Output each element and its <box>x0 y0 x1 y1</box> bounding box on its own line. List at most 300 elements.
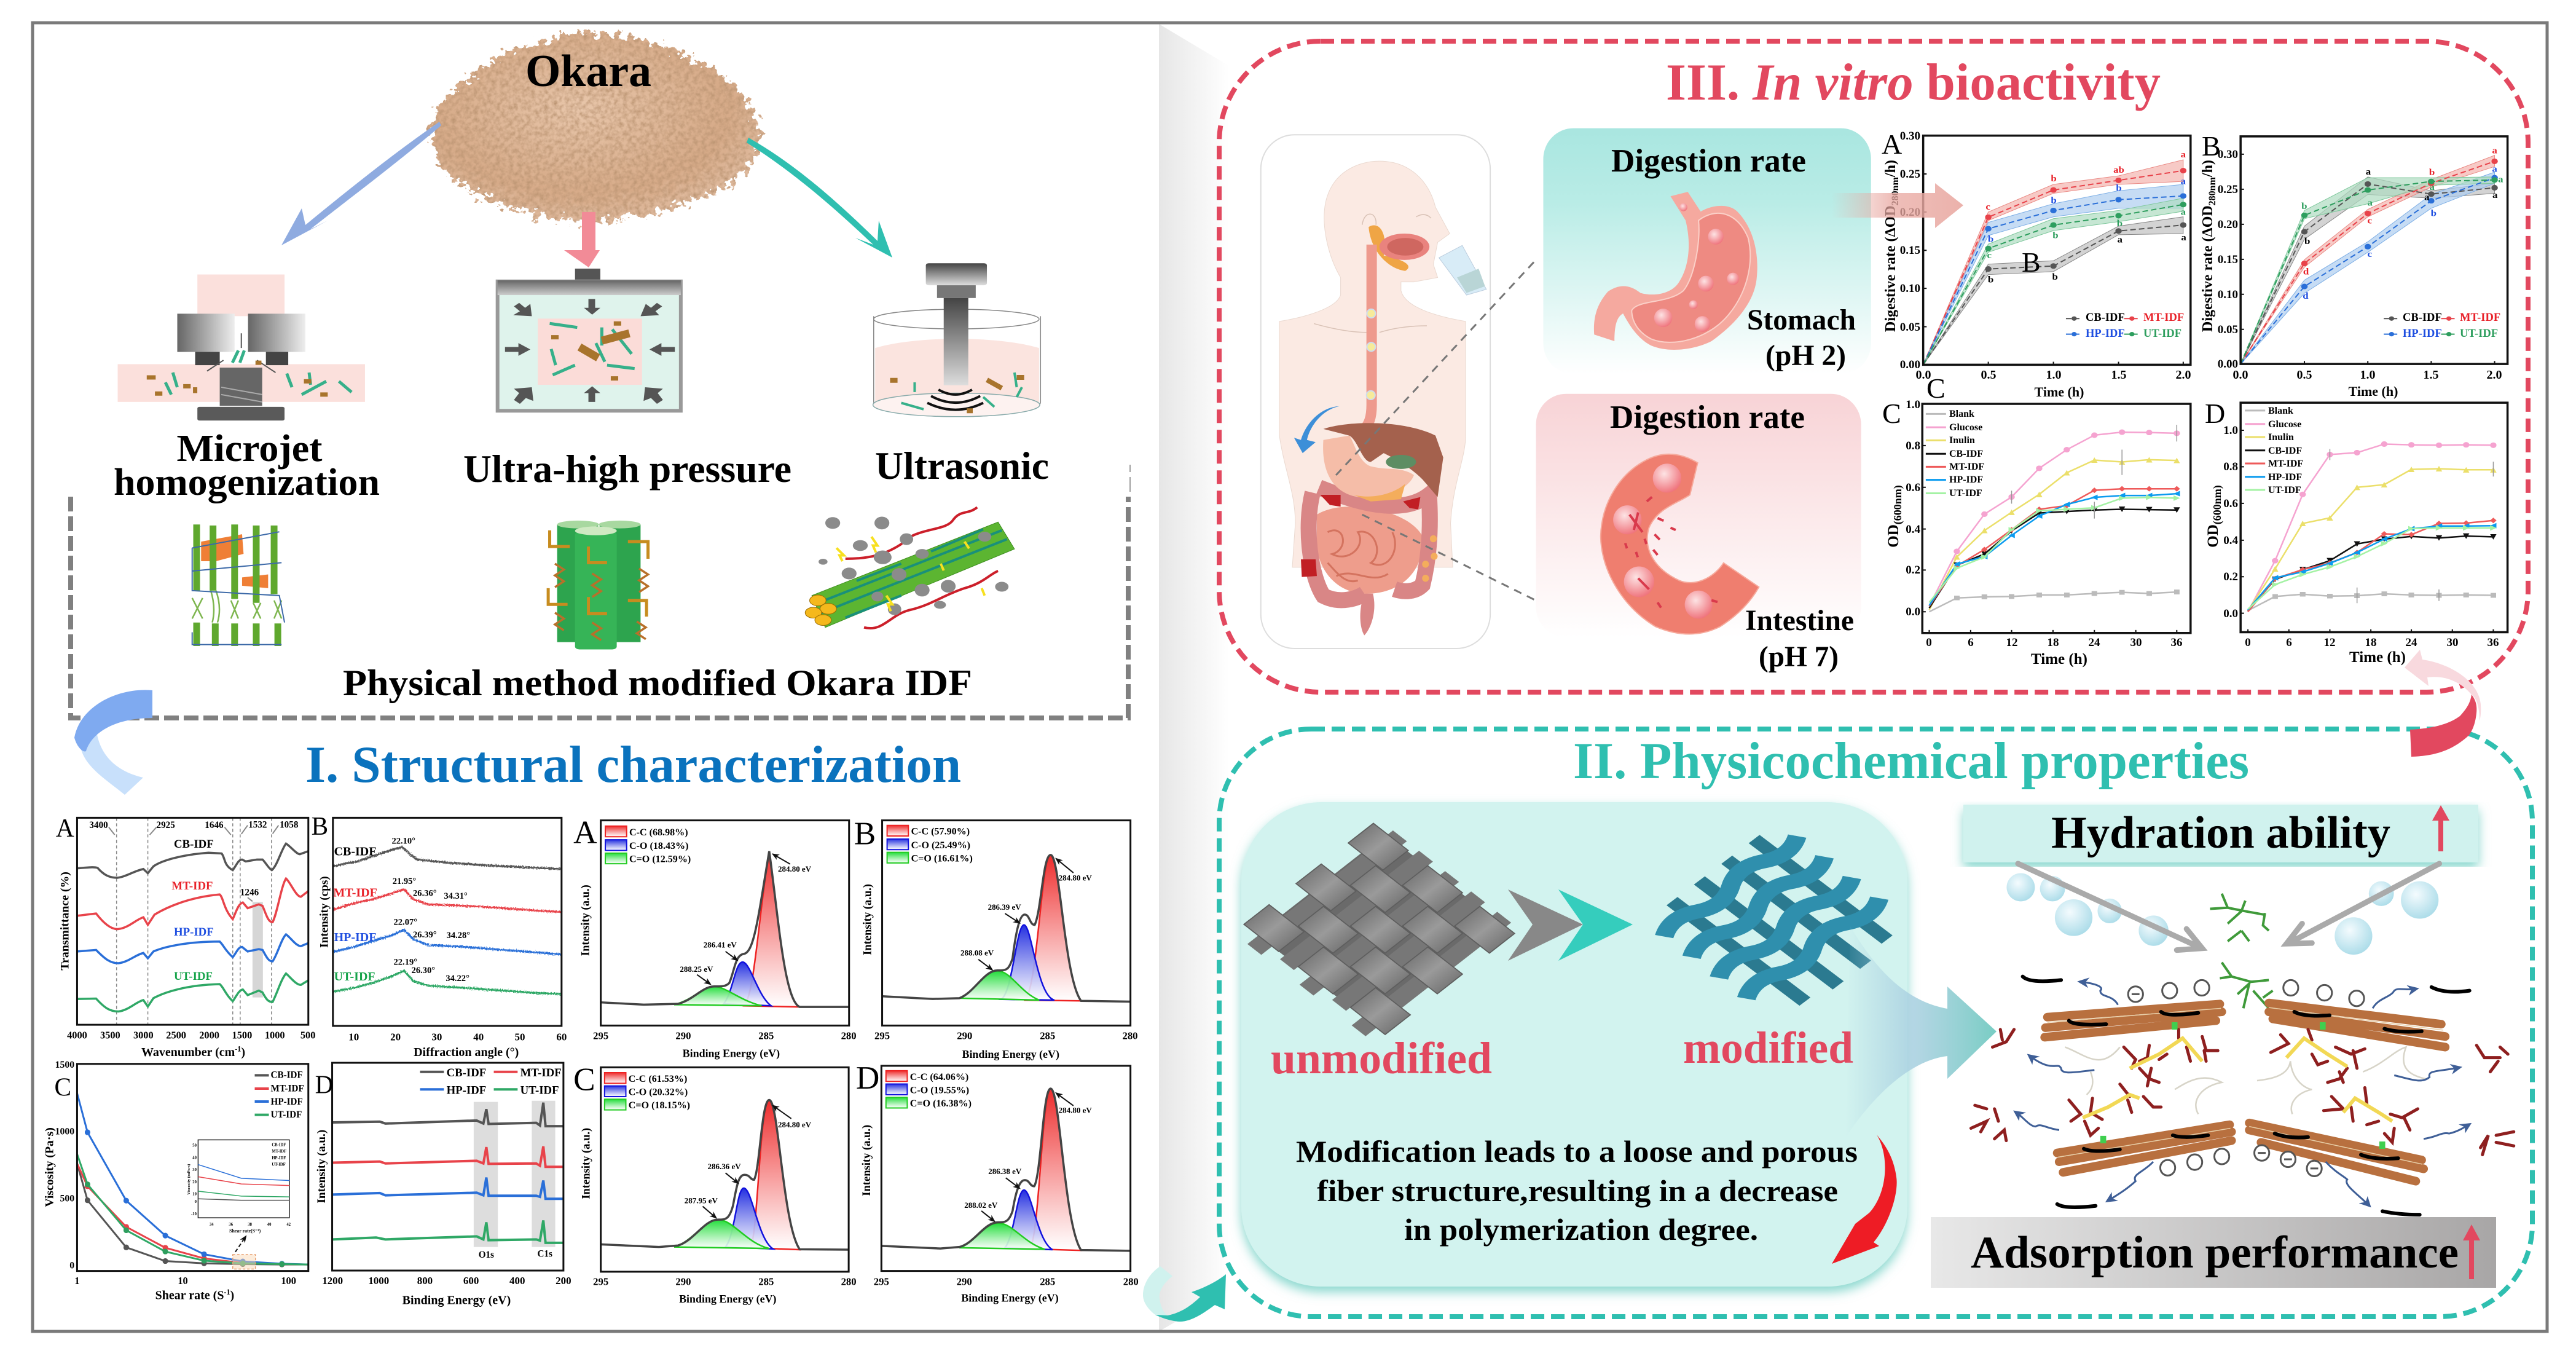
panel: XPS C1s chart D <box>856 1060 1139 1305</box>
chart: digestive rate intestine B <box>2240 136 2508 364</box>
esophagus <box>1364 245 1372 429</box>
dashed container: physical method modified IDF <box>71 497 1128 718</box>
chart B labels: Digestive rate (ΔOD <box>2200 205 2216 332</box>
text block: modification summary: fiber structure,resulting in a decrease <box>1317 1173 1838 1208</box>
panel: XPS C1s chart A: Intensity (a.u.) <box>579 885 592 956</box>
chart B labels: 2.0 <box>2486 368 2502 382</box>
panel: XPS survey chart D: D <box>315 1071 333 1099</box>
arrow: okara to ultrasonic <box>747 138 892 258</box>
chart: digestive rate intestine B: a <box>2498 175 2503 184</box>
panel: XRD chart B: MT-IDF <box>333 886 377 899</box>
label: Physical method modified Okara IDF: Physical method modified Okara IDF <box>343 663 972 703</box>
panel: XRD chart B: 34.28° <box>447 931 470 940</box>
panel: XRD chart B: 50 <box>514 1031 525 1043</box>
panel: viscosity chart C: HP-IDF <box>271 1097 303 1107</box>
chart C labels: 1.0 <box>1906 398 1920 411</box>
chart D labels: Glucose <box>2268 419 2301 430</box>
arrow: hydration up <box>2432 805 2449 851</box>
panel: FTIR chart A: 2925 <box>157 820 175 830</box>
text block: modification summary: Modification leads to a loose and porous <box>1296 1134 1858 1169</box>
chart B labels: 0.00 <box>2218 358 2238 371</box>
chart D labels: Time (h) <box>2349 649 2406 666</box>
panel: XPS C1s chart C <box>573 1061 857 1306</box>
panel: FTIR chart A: Transmittance (%) <box>59 872 71 971</box>
arrow: large gradient arrow into performance panel <box>1845 926 1997 1138</box>
panel: viscosity chart C: CB-IDF <box>271 1070 303 1081</box>
arrow: adsorption up <box>2463 1224 2480 1279</box>
chart C labels: Blank <box>1949 409 1974 419</box>
glass of fibre <box>1439 245 1486 295</box>
chart D labels: 0.6 <box>2223 497 2238 510</box>
chart C labels: 24 <box>2088 636 2100 649</box>
arrow: okara to ultra-high pressure <box>564 212 600 267</box>
panel: XPS C1s chart D: 280 <box>1123 1275 1139 1287</box>
panel: XRD chart B: 10 <box>348 1031 359 1043</box>
chart: digestive rate stomach A: b <box>2052 231 2059 240</box>
banner: hydration ability <box>1963 805 2478 862</box>
panel: XPS C1s chart B: 295 <box>874 1030 890 1042</box>
panel: XPS C1s chart C: Binding Energy (eV) <box>679 1293 777 1306</box>
chart: digestive rate intestine B: a <box>2430 183 2435 192</box>
chart D labels: 1.0 <box>2223 424 2238 437</box>
panel: XPS C1s chart A: 286.41 eV <box>704 940 737 950</box>
heading: III. In vitro bioactivity: III. In vitro bioactivity <box>1666 53 2161 111</box>
chart: digestive rate intestine B: c <box>2368 250 2372 259</box>
label: unmodified: unmodified <box>1271 1033 1492 1083</box>
panel: XRD chart B <box>312 813 567 1059</box>
panel: viscosity chart C: 0 <box>195 1200 197 1204</box>
panel: XPS C1s chart D: 285 <box>1040 1275 1055 1287</box>
panel: XPS C1s chart B: Intensity (a.u.) <box>862 884 874 955</box>
label: intestine pH 7: Intestine <box>1745 605 1854 637</box>
yellow linkers <box>2083 1038 2392 1121</box>
panel: FTIR chart A: 3500 <box>100 1029 120 1041</box>
panel: XPS survey chart D: Intensity (a.u.) <box>315 1130 328 1204</box>
chart: digestive rate stomach A: b <box>2117 219 2122 229</box>
panel: viscosity chart C: 38 <box>248 1223 253 1227</box>
large intestine <box>1309 487 1430 600</box>
label: Microjet homogenization <box>114 428 380 503</box>
chart C labels <box>1882 398 2183 668</box>
panel: viscosity chart C: CB-IDF <box>272 1143 286 1147</box>
panel: FTIR chart A: 4000 <box>67 1029 87 1041</box>
card: stomach digestion <box>1543 128 1871 374</box>
panel: XPS survey chart D: UT-IDF <box>520 1084 559 1097</box>
red polymer <box>1971 1030 2514 1155</box>
label: stomach pH 2: Stomach <box>1747 304 1856 336</box>
chart: digestive rate intestine B: a <box>2424 192 2430 202</box>
panel: XRD chart B: 34.22° <box>446 974 469 984</box>
chart A labels: UT-IDF <box>2143 328 2181 340</box>
panel: FTIR chart A: 3400 <box>89 820 108 830</box>
panel: XPS C1s chart B: 286.39 eV <box>988 902 1021 912</box>
arrow: okara to microjet <box>281 122 441 245</box>
chart A labels: 280nm <box>1890 176 1901 205</box>
panel: XPS survey chart D: 1200 <box>322 1275 343 1287</box>
chart C labels: 12 <box>2006 636 2018 649</box>
chart: digestive rate stomach A: c <box>1987 251 1992 261</box>
chart B labels: 0.5 <box>2297 368 2312 382</box>
chart A labels: Time (h) <box>2035 384 2084 400</box>
panel: XPS C1s chart B: 285 <box>1040 1030 1055 1042</box>
chart D labels: 24 <box>2405 636 2417 649</box>
panel: FTIR chart A: 1000 <box>265 1029 285 1041</box>
chart D labels: 0.8 <box>2223 460 2238 473</box>
panel: viscosity chart C: Viscosity (Pa·s) <box>44 1127 57 1207</box>
panel: XPS C1s chart C: Intensity (a.u.) <box>580 1128 593 1199</box>
panel: FTIR chart A: 1500 <box>232 1029 252 1041</box>
chart A labels: /h) <box>1883 160 1899 178</box>
panel: XPS C1s chart B: 284.80 eV <box>1059 873 1092 882</box>
chart A labels: 0.5 <box>1981 368 1996 382</box>
chart: digestive rate stomach A: b <box>2116 183 2122 193</box>
blue efflux arrows <box>2016 982 2468 1205</box>
chart: digestive rate intestine B: d <box>2303 267 2309 277</box>
panel: XPS C1s chart A: A <box>573 814 597 851</box>
panel: FTIR chart A: CB-IDF <box>174 838 214 851</box>
panel: XPS C1s chart B: 290 <box>957 1030 972 1042</box>
chart B labels: 0.05 <box>2218 323 2238 336</box>
panel: viscosity chart C: 1 <box>74 1275 80 1287</box>
chart: digestive rate intestine B: a <box>2492 191 2498 200</box>
chart C labels: 0.2 <box>1906 564 1920 577</box>
panel: XRD chart B: 40 <box>473 1031 484 1043</box>
panel: XPS C1s chart C: C-C (61.53%) <box>629 1074 687 1084</box>
panel: viscosity chart C: UT-IDF <box>272 1162 286 1167</box>
panel border: III in vitro bioactivity <box>1219 41 2528 692</box>
panel: XPS C1s chart A: C-C (68.98%) <box>629 827 688 838</box>
chart D labels: 12 <box>2324 636 2335 649</box>
chart C labels: MT-IDF <box>1949 462 1984 472</box>
panel: viscosity chart C: 30 <box>192 1168 197 1172</box>
chart A labels: 0.00 <box>1900 358 1920 371</box>
chart B labels: HP-IDF <box>2403 328 2442 340</box>
chart: digestive rate stomach A: b <box>1988 275 1994 285</box>
panel: XPS C1s chart A: 290 <box>675 1030 691 1042</box>
chart D labels: 30 <box>2447 636 2458 649</box>
chart B labels: Time (h) <box>2349 384 2398 399</box>
salivary glands and mouth <box>1368 226 1408 271</box>
chart D labels: OD <box>2205 524 2221 548</box>
icon: intestine cross-section <box>1601 454 1759 634</box>
chart A labels: C <box>1926 373 1946 404</box>
chart: digestive rate stomach A: c <box>1985 202 1990 212</box>
chart C labels: 0.4 <box>1906 523 1921 536</box>
chart: digestive rate intestine B: d <box>2303 291 2309 301</box>
panel: XPS C1s chart C: 290 <box>675 1275 691 1287</box>
panel: XPS C1s chart C: 287.95 eV <box>685 1196 718 1205</box>
chart: digestive rate intestine B: a <box>2368 199 2373 208</box>
panel: FTIR chart A: Wavenumber (cm <box>141 1046 235 1059</box>
chart: growth curve C <box>1922 404 2191 633</box>
arrow: I to II link <box>1143 1266 1226 1322</box>
chart B labels: 0.0 <box>2233 368 2248 382</box>
panel: XRD chart B: CB-IDF <box>334 845 376 859</box>
panel: viscosity chart C: UT-IDF <box>271 1110 302 1120</box>
panel: XRD chart B: 20 <box>390 1031 401 1043</box>
chart: digestive rate stomach A <box>1923 136 2191 365</box>
chart B labels: 0.10 <box>2218 288 2238 301</box>
chart: digestive rate intestine B: a <box>2492 164 2497 174</box>
panel: XPS C1s chart D: C-O (19.55%) <box>910 1085 969 1095</box>
heading: II. Physicochemical properties: II. Physicochemical properties <box>1573 732 2249 790</box>
panel: XPS C1s chart A: 284.80 eV <box>778 864 812 873</box>
panel: XPS C1s chart D: C-C (64.06%) <box>910 1072 968 1082</box>
panel: XRD chart B: 60 <box>556 1031 567 1043</box>
panel: XPS C1s chart A: C=O (12.59%) <box>629 854 691 865</box>
chart: digestive rate intestine B: c <box>2368 216 2372 226</box>
chart B labels: UT-IDF <box>2460 328 2498 340</box>
panel: XPS C1s chart A: 285 <box>758 1030 774 1042</box>
chart: digestive rate intestine B: a <box>2492 146 2497 156</box>
arrow: curved return to structural characterization <box>74 690 152 795</box>
body silhouette <box>1279 161 1466 567</box>
panel: viscosity chart C: 1000 <box>55 1127 74 1137</box>
panel: XPS survey chart D: 400 <box>509 1275 525 1287</box>
chart A labels: MT-IDF <box>2143 312 2184 324</box>
panel: XPS C1s chart B: 280 <box>1122 1030 1138 1042</box>
label: Microjet homogenization: homogenization <box>114 462 380 503</box>
diagram: fibre adsorption <box>1971 864 2514 1215</box>
chart C labels: Glucose <box>1949 422 1982 433</box>
panel: viscosity chart C: -10 <box>191 1212 197 1216</box>
chart C labels: 18 <box>2048 636 2059 649</box>
panel: viscosity chart C: 42 <box>286 1223 291 1227</box>
panel: viscosity chart C: HP-IDF <box>272 1156 286 1161</box>
panel: FTIR chart A: 2000 <box>199 1029 219 1041</box>
chart D labels: CB-IDF <box>2268 446 2302 456</box>
gray web <box>2065 1047 2425 1114</box>
chart: digestive rate intestine B: a <box>2366 167 2371 177</box>
panel: XPS C1s chart B: Binding Energy (eV) <box>962 1048 1059 1061</box>
chart D labels: 0.4 <box>2223 534 2238 547</box>
panel: XPS survey chart D: CB-IDF <box>447 1066 486 1079</box>
panel: XRD chart B: 30 <box>431 1031 442 1043</box>
panel: XPS C1s chart C: 285 <box>758 1275 774 1287</box>
panel: FTIR chart A: UT-IDF <box>174 970 213 983</box>
chart D labels: 0.2 <box>2223 570 2238 583</box>
panel: viscosity chart C: C <box>54 1073 71 1102</box>
panel: viscosity chart C: Shear rate (S <box>155 1288 224 1302</box>
chart: digestive rate stomach A: b <box>2051 195 2057 205</box>
chart C labels: (600nm) <box>1891 485 1904 524</box>
chart: digestive rate stomach A: a <box>2181 208 2186 217</box>
arrow: III to II link red <box>2410 695 2476 757</box>
chart: digestive rate stomach A: b <box>2051 174 2057 184</box>
panel: XRD chart B: HP-IDF <box>334 931 376 944</box>
panel: viscosity chart C: ) <box>230 1288 234 1302</box>
label: intestine pH 7 <box>1745 605 1854 673</box>
black adsorbates <box>2023 977 2470 1215</box>
label: Hydration ability: Hydration ability <box>2051 808 2390 858</box>
panel: viscosity chart C: -1 <box>224 1288 230 1296</box>
chart B labels: 0.15 <box>2218 253 2238 266</box>
chart: digestive rate intestine B: b <box>2304 237 2311 246</box>
panel: XPS survey chart D: C1s <box>537 1249 552 1260</box>
chart A labels: A <box>1882 128 1902 160</box>
bundles <box>2044 1003 2445 1181</box>
charge circles <box>2128 980 2364 1177</box>
panel: XPS C1s chart C: C=O (18.15%) <box>629 1100 690 1111</box>
chart A labels: CB-IDF <box>2086 312 2125 324</box>
panel: XPS C1s chart D: Intensity (a.u.) <box>860 1125 873 1196</box>
chart C labels: HP-IDF <box>1949 475 1983 485</box>
chart B labels: 0.30 <box>2218 148 2238 161</box>
panel: viscosity chart C: 40 <box>267 1223 272 1227</box>
panel: viscosity chart C: 1500 <box>55 1060 74 1070</box>
panel: XPS C1s chart C: C <box>573 1061 595 1097</box>
book fold shading <box>1159 24 1229 1331</box>
panel: FTIR chart A: 2500 <box>166 1029 186 1041</box>
panel: FTIR chart A: 1246 <box>240 887 259 897</box>
panel: viscosity chart C: 500 <box>60 1193 74 1204</box>
label: digestion rate stomach: Digestion rate <box>1611 143 1806 179</box>
chart: digestive rate stomach A: b <box>1988 234 1994 244</box>
gray arrows <box>2018 864 2440 950</box>
chart A labels: 1.0 <box>2046 368 2061 382</box>
inflamed spots <box>1301 495 1420 577</box>
chart C labels: 0.0 <box>1906 605 1920 618</box>
icon: stomach <box>1594 192 1757 350</box>
okara pile <box>431 32 760 223</box>
panel: XPS C1s chart C: C-O (20.32%) <box>629 1087 688 1097</box>
chart C labels: UT-IDF <box>1949 488 1982 499</box>
chart A labels: 0.20 <box>1900 206 1920 219</box>
panel: viscosity chart C: 34 <box>210 1223 214 1227</box>
label: Adsorption performance: Adsorption performance <box>1971 1228 2459 1278</box>
chart A labels: 0.15 <box>1900 244 1920 257</box>
text block: modification summary: in polymerization degree. <box>1404 1212 1758 1247</box>
panel: FTIR chart A: MT-IDF <box>171 880 213 893</box>
icon: unmodified weave <box>1233 819 1520 1043</box>
panel: XRD chart B: 22.10° <box>392 836 415 846</box>
panel: viscosity chart C: 20 <box>192 1180 197 1185</box>
chart D labels: 0 <box>2245 636 2251 649</box>
panel: XPS C1s chart C: 284.80 eV <box>778 1120 812 1129</box>
arrow: stomach to chart A <box>1832 183 1963 228</box>
panel: XPS C1s chart B: C-C (57.90%) <box>911 827 970 837</box>
chart C labels: 30 <box>2130 636 2142 649</box>
panel: XPS survey chart D: MT-IDF <box>520 1066 562 1079</box>
panel: XPS C1s chart D: Binding Energy (eV) <box>961 1292 1059 1305</box>
chart B labels: 0.20 <box>2218 218 2238 231</box>
panel: viscosity chart C: MT-IDF <box>271 1083 304 1094</box>
panel: viscosity chart C: Viscosity (mPa·s) <box>187 1164 191 1195</box>
chart A labels: Digestive rate (ΔOD <box>1883 205 1899 332</box>
label: Microjet homogenization: Microjet <box>177 428 323 470</box>
chart D labels: 0.0 <box>2223 607 2238 620</box>
label: Ultra-high pressure: Ultra-high pressure <box>463 447 791 491</box>
chart D labels: 36 <box>2488 636 2499 649</box>
panel: XPS C1s chart C: 280 <box>841 1275 857 1287</box>
title: Okara: Okara <box>525 46 651 97</box>
panel: XRD chart B: 26.30° <box>412 966 435 976</box>
chart: digestive rate stomach A: b <box>2052 272 2058 282</box>
panel: XPS survey chart D: HP-IDF <box>447 1084 486 1097</box>
panel: XRD chart B: 26.39° <box>413 930 437 940</box>
chart A labels: 2.0 <box>2175 368 2191 382</box>
panel: XPS C1s chart A: 295 <box>593 1030 608 1042</box>
chart D labels: MT-IDF <box>2268 459 2303 469</box>
panel: XPS C1s chart A: Binding Energy (eV) <box>683 1047 780 1060</box>
panel: XPS survey chart D: O1s <box>479 1250 494 1260</box>
chart A labels: 1.5 <box>2111 368 2126 382</box>
panel: XPS survey chart D <box>315 1063 571 1307</box>
panel: XPS C1s chart D: 288.02 eV <box>964 1200 998 1210</box>
panel: viscosity chart C: 50 <box>192 1143 197 1148</box>
small intestine <box>1317 507 1423 594</box>
label: intestine pH 7: (pH 7) <box>1759 641 1839 673</box>
green polymer <box>2210 894 2273 1008</box>
panel border: II physicochemical properties <box>1219 729 2532 1317</box>
panel: XRD chart B: UT-IDF <box>334 970 375 984</box>
panel: XPS C1s chart D: 295 <box>874 1275 889 1287</box>
panel: XPS C1s chart D: 286.38 eV <box>988 1167 1022 1176</box>
icon: modified porous weave <box>1644 821 1917 1027</box>
chart C labels: 0 <box>1926 636 1932 649</box>
chart D labels: UT-IDF <box>2268 485 2301 495</box>
panel: viscosity chart C: 10 <box>192 1193 197 1197</box>
chart D labels <box>2205 398 2499 666</box>
chart C labels: CB-IDF <box>1949 449 1983 459</box>
arrow: red decrease <box>1832 1135 1897 1264</box>
panel: viscosity chart C: MT-IDF <box>272 1149 286 1154</box>
chart: digestive rate stomach A: a <box>2181 233 2186 243</box>
panel: XPS C1s chart B: B <box>854 816 876 852</box>
label: modified: modified <box>1683 1023 1853 1073</box>
chart D labels: 6 <box>2286 636 2292 649</box>
panel: viscosity chart C <box>44 1060 308 1302</box>
chart A labels: 0.0 <box>1916 368 1931 382</box>
icon: ultra-high pressure vessel <box>498 269 681 411</box>
arrow: chevrons unmodified to modified <box>1508 889 1633 961</box>
label: Ultrasonic: Ultrasonic <box>875 444 1049 487</box>
panel: human digestive system <box>1261 128 1871 648</box>
panel: viscosity chart C: 10 <box>178 1275 188 1287</box>
chart A labels: 0.10 <box>1900 282 1920 295</box>
chart B labels: CB-IDF <box>2403 312 2442 324</box>
chart B labels: 280nm <box>2207 176 2218 205</box>
panel: XRD chart B: 26.36° <box>413 889 437 899</box>
panel: FTIR chart A: -1 <box>235 1044 241 1053</box>
panel: XPS C1s chart B: C=O (16.61%) <box>911 853 973 864</box>
panel: XPS C1s chart A <box>573 814 857 1060</box>
chart D labels: 18 <box>2365 636 2377 649</box>
panel: XPS survey chart D: 1000 <box>368 1275 389 1287</box>
chart C labels: Time (h) <box>2031 651 2087 668</box>
chart A labels: B <box>2022 246 2041 278</box>
stomach and liver <box>1323 436 1414 498</box>
chart C labels: 36 <box>2170 636 2183 649</box>
chart: digestive rate intestine B: b <box>2431 209 2437 218</box>
panel: FTIR chart A: ) <box>241 1046 245 1059</box>
panel: FTIR chart A: 1058 <box>280 819 299 830</box>
panel: XRD chart B: 22.19° <box>394 957 417 968</box>
chart D labels: D <box>2205 398 2225 429</box>
chart: digestive rate stomach A: a <box>2181 176 2186 186</box>
chart A labels: 0.30 <box>1900 130 1920 143</box>
chart A labels: 0.25 <box>1900 168 1920 181</box>
arrow: III to II link pale <box>2405 650 2481 721</box>
panel: XPS C1s chart A: 288.25 eV <box>680 964 713 974</box>
panel: viscosity chart C: 100 <box>281 1275 296 1287</box>
card: intestine digestion <box>1536 394 1861 637</box>
panel: XPS survey chart D: 600 <box>463 1275 479 1287</box>
chart C labels: 6 <box>1968 636 1974 649</box>
panel: FTIR chart A: 500 <box>300 1029 315 1041</box>
panel: XPS C1s chart D: 290 <box>957 1275 972 1287</box>
chart A labels <box>1882 128 2191 404</box>
